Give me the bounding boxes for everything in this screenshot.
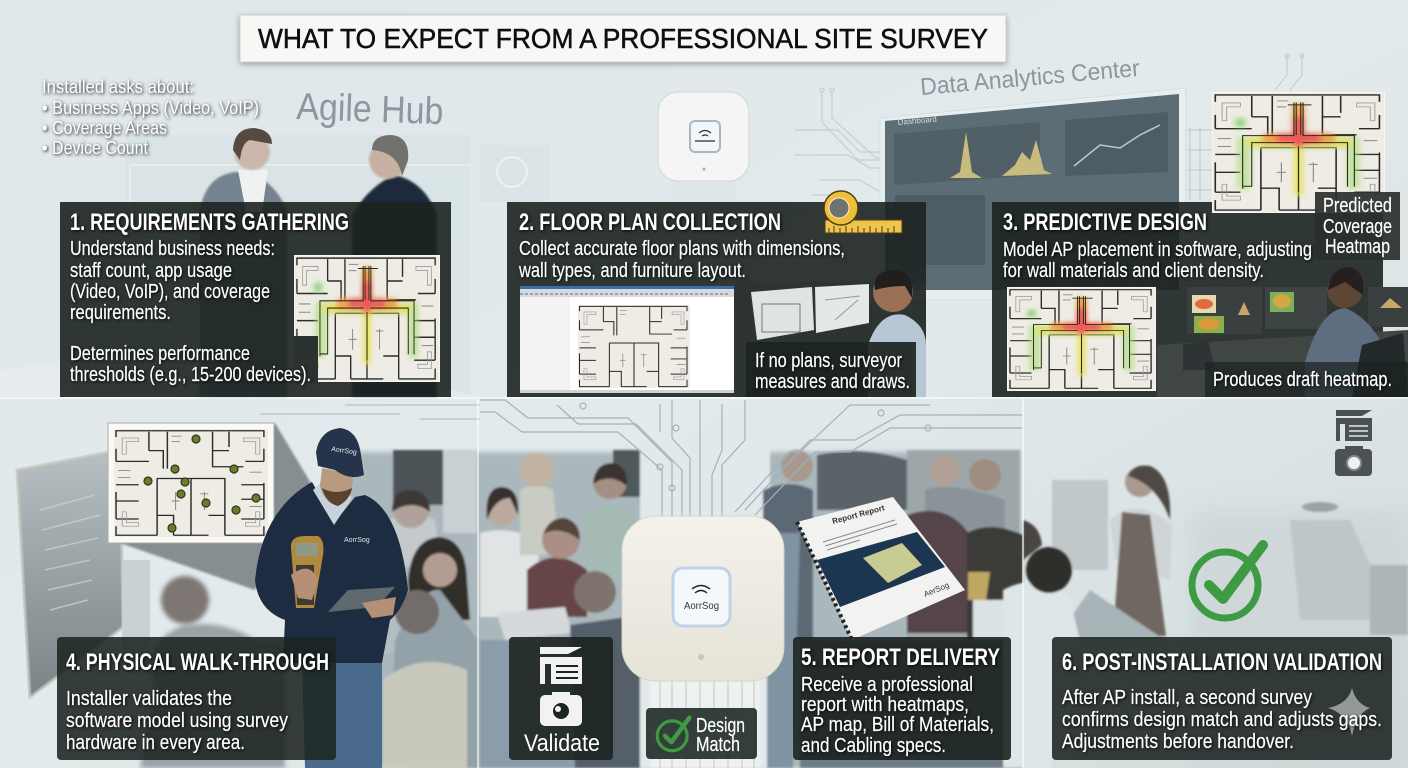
- body text 3: for wall materials and client density.: [1003, 260, 1264, 282]
- body text 2: Collect accurate floor plans with dimensions,: [519, 238, 845, 260]
- grid lines: [0, 398, 1408, 768]
- body text 5: and Cabling specs.: [801, 735, 946, 757]
- body text 5: AP map, Bill of Materials,: [801, 714, 994, 736]
- client question list: [42, 77, 259, 158]
- heading 5: 5. REPORT DELIVERY: [801, 644, 1000, 671]
- left wall glass panel: [480, 145, 550, 202]
- barista cafe scene: [1003, 465, 1408, 768]
- panel: validate: Validate: [524, 730, 600, 757]
- client question list: Installed asks about:: [42, 77, 194, 97]
- panel 6: post-installation validation: [1052, 637, 1392, 760]
- icon: clipboard: [540, 647, 582, 684]
- body text 1: requirements.: [70, 302, 171, 324]
- top left wall: Agile Hub backdrop: [0, 86, 480, 397]
- client question list: • Device Count: [42, 138, 148, 158]
- panel 1: requirements gathering: [60, 202, 451, 397]
- circuit traces converging to access point: [260, 400, 1023, 768]
- icon: clipboard and camera, top right: [1335, 410, 1372, 476]
- heatmap 3 lower: [1007, 287, 1156, 391]
- icon: camera: [540, 692, 582, 726]
- body text 1: staff count, app usage: [70, 260, 232, 282]
- predicted coverage heatmap: [1212, 92, 1400, 260]
- surveyor with scanner and tablet: AorrSog: [331, 446, 357, 457]
- caption: predicted coverage heatmap: Predicted: [1323, 195, 1392, 217]
- spiral report booklet: Report Report: [831, 503, 886, 526]
- client question list: • Coverage Areas: [42, 118, 167, 138]
- body text 6: Adjustments before handover.: [1062, 731, 1294, 753]
- body text 6: [1062, 687, 1382, 753]
- small access point on wall: [658, 92, 749, 205]
- spiral report booklet: [797, 497, 965, 640]
- caption: predicted coverage heatmap: Heatmap: [1325, 236, 1390, 258]
- badge: design match: [646, 708, 757, 759]
- title banner: WHAT TO EXPECT FROM A PROFESSIONAL SITE SURVEY: [258, 23, 988, 54]
- analyst at monitor wall: [1157, 267, 1408, 397]
- surveyor with scanner and tablet: [255, 428, 408, 768]
- floor plan with measured AP points: [108, 423, 274, 543]
- faint circuit lines top: [795, 54, 1304, 200]
- caption: predicted coverage heatmap: Coverage: [1323, 216, 1392, 238]
- body text 5: Receive a professional: [801, 674, 973, 696]
- panel 3: predictive design: [992, 202, 1408, 397]
- heading 3: 3. PREDICTIVE DESIGN: [1003, 209, 1207, 236]
- wall sign: Data Analytics Center: Data Analytics Center: [919, 55, 1141, 101]
- title banner: [240, 15, 1006, 62]
- body text 3: Model AP placement in software, adjusting: [1003, 239, 1312, 261]
- badge: design match: Design: [696, 715, 745, 737]
- body text 1: Understand business needs:: [70, 238, 275, 260]
- caption: no plans: measures and draws.: [755, 371, 910, 393]
- panel 5: report delivery: [793, 637, 1011, 760]
- body text 2: [518, 238, 845, 282]
- heading 4: 4. PHYSICAL WALK-THROUGH: [66, 649, 329, 676]
- caption: no plans: If no plans, surveyor: [755, 350, 902, 372]
- data analytics dashboard screen: [880, 55, 1186, 300]
- heading 2: 2. FLOOR PLAN COLLECTION: [519, 209, 781, 236]
- caption: no plans: [746, 342, 916, 397]
- body text 1: thresholds (e.g., 15-200 devices).: [70, 364, 311, 386]
- bottom row: people in the crowd: [340, 440, 1023, 768]
- icon: tape measure: [824, 191, 902, 233]
- panel 4: physical walk-through: [57, 637, 336, 760]
- spiral report booklet: AerSog: [922, 581, 950, 599]
- wall sign: Agile Hub: Agile Hub: [296, 86, 444, 133]
- body text 1: (Video, VoIP), and coverage: [70, 281, 270, 303]
- chalkboard menu: [17, 450, 150, 697]
- caption: predicted coverage heatmap: [1315, 192, 1400, 260]
- panel 2: floor plan collection: [507, 202, 926, 397]
- badge: design match: Match: [696, 734, 740, 756]
- client question list: • Business Apps (Video, VoIP): [42, 98, 259, 118]
- icon: validation check mark: [1192, 545, 1263, 618]
- data analytics dashboard screen: Dashboard: [897, 115, 937, 127]
- heatmap 1: [294, 255, 440, 383]
- body text 5: [801, 674, 994, 757]
- large access point: AorrSog: [684, 601, 719, 612]
- body text 5: report with heatmaps,: [801, 694, 969, 716]
- body text 4: [66, 688, 288, 754]
- heading 1: 1. REQUIREMENTS GATHERING: [70, 209, 349, 236]
- body text 2: wall types, and furniture layout.: [518, 260, 746, 282]
- surveyor with scanner and tablet: AorrSog: [344, 537, 370, 544]
- body text 1: [70, 238, 311, 386]
- caption: draft heatmap: [1205, 362, 1408, 397]
- seated person behind walk-through: [120, 423, 312, 768]
- body text 3: [1003, 239, 1312, 282]
- body text 4: software model using survey: [66, 710, 288, 732]
- body text 4: hardware in every area.: [66, 732, 245, 754]
- surveyor at monitors: [735, 270, 926, 397]
- decorative sparkle: [1328, 688, 1370, 736]
- panel: validate: [509, 637, 613, 760]
- crowd right of AP: [763, 484, 813, 640]
- body text 1: Determines performance: [70, 343, 250, 365]
- body text 4: Installer validates the: [66, 688, 232, 710]
- photo: two people talking: [200, 128, 437, 397]
- body text 6: After AP install, a second survey: [1062, 687, 1312, 709]
- CAD floor plan screenshot: [520, 286, 734, 393]
- icon: green check: [657, 718, 689, 751]
- large access point: [622, 516, 784, 681]
